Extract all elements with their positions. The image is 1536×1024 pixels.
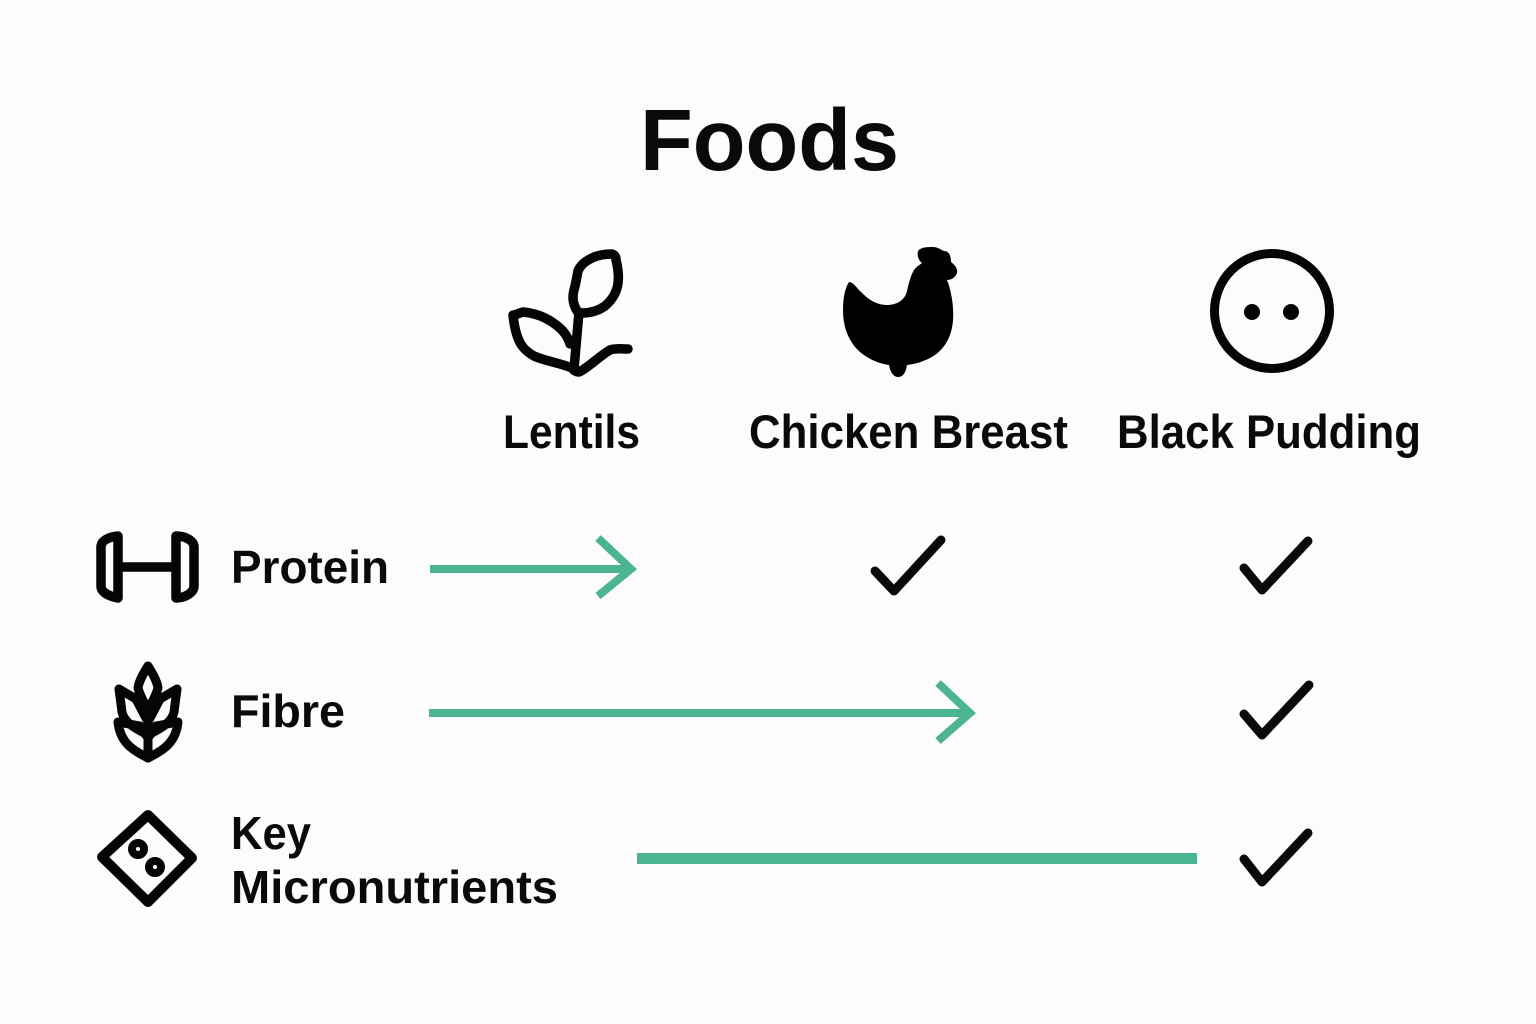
arrow: Fibre to Chicken Breast [429, 683, 970, 741]
row: Key Micronutrients [102, 807, 1308, 913]
check: Fibre, Black Pudding [1244, 685, 1309, 735]
check: Protein, Chicken Breast [875, 540, 941, 591]
icon: lentil plant [513, 254, 628, 372]
label: Fibre: Fibre [231, 685, 345, 737]
label: Chicken Breast: Chicken Breast [749, 405, 1068, 458]
column: Black Pudding [1117, 254, 1421, 458]
column: Lentils [503, 254, 640, 458]
icon: black pudding slice [1214, 254, 1330, 368]
bar: Key Micronutrients line [637, 853, 1197, 864]
title: Foods [640, 92, 899, 189]
check: Key Micronutrients, Black Pudding [1244, 833, 1308, 882]
label: Key Micronutrients: Key [231, 807, 311, 859]
icon: chicken [843, 247, 957, 377]
row: Fibre [118, 666, 1309, 758]
label: Key Micronutrients [231, 807, 558, 913]
check: Protein, Black Pudding [1244, 541, 1308, 590]
label: Key Micronutrients: Micronutrients [231, 861, 558, 913]
label: Black Pudding: Black Pudding [1117, 405, 1421, 458]
label: Protein: Protein [231, 541, 389, 593]
icon: wheat [118, 666, 178, 758]
column: Chicken Breast [749, 247, 1068, 458]
icon: micronutrient diamond [102, 815, 192, 902]
arrow: Protein to Lentils [430, 538, 631, 596]
row: Protein [101, 536, 1308, 598]
label: Lentils: Lentils [503, 405, 640, 458]
icon: dumbbell [101, 536, 194, 598]
